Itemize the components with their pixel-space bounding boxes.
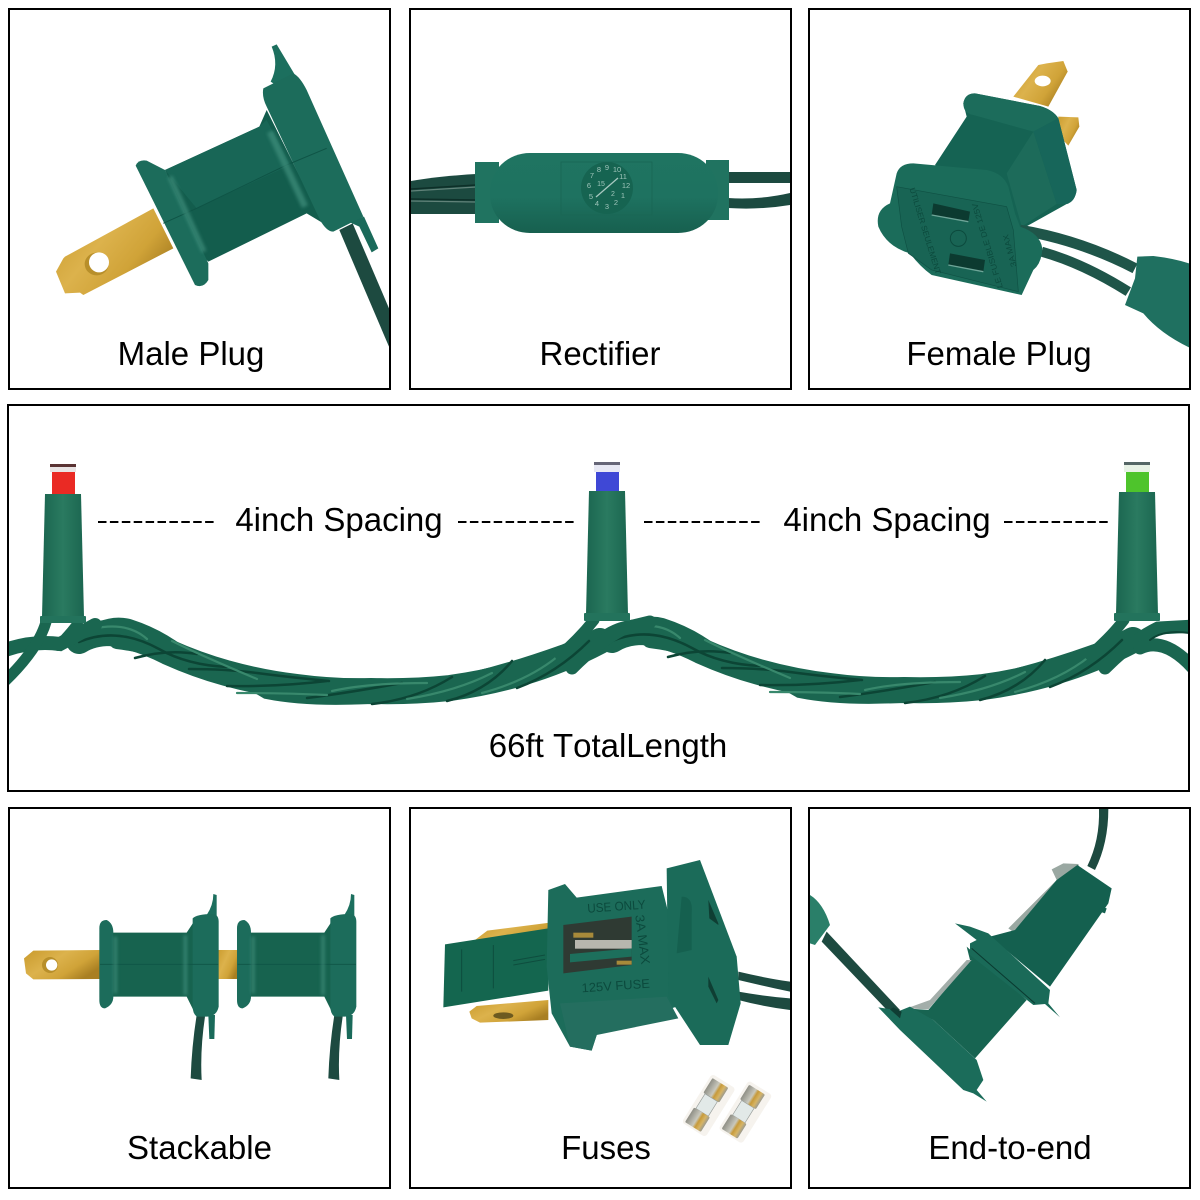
label: spacing left: 4inch Spacing [235,501,443,538]
label: total length: 66ft TotalLength [489,727,727,764]
rectifier photo: 12 [622,181,630,190]
label: rectifier: Rectifier [539,335,661,372]
female plug photo: 3A MAX [1001,233,1019,268]
bulb: green [1114,462,1160,621]
fused plug photo: 3A MAX [632,914,652,966]
panel: end-to-end [809,808,1190,1188]
twisted wire [0,620,1195,704]
panel: light string spacing [0,405,1195,791]
panel frame [410,9,791,389]
label: stackable: Stackable [127,1129,272,1166]
panel: female plug [809,9,1190,389]
label: female plug: Female Plug [906,335,1092,372]
rectifier photo: 11 [619,172,627,181]
rectifier photo: 15 [597,181,605,188]
female plug photo [878,61,1189,347]
rectifier photo: 5 [589,192,593,201]
label: spacing right: 4inch Spacing [783,501,991,538]
rectifier photo [411,153,790,233]
panel frame [8,405,1189,791]
rectifier photo: 4 [595,199,599,208]
fused plug photo: 125V FUSE [581,977,650,995]
fuse 2 [718,1080,772,1144]
rectifier photo: 6 [587,181,591,190]
dashed spacing lines [98,521,1108,523]
connected plugs photo [810,809,1112,1102]
rectifier photo: 10 [613,165,621,174]
panel frame [410,808,791,1188]
rectifier photo: 1 [621,191,625,200]
panel: fuses [410,808,791,1188]
rectifier photo: 2 [611,191,615,198]
fused plug photo: USE ONLY [587,898,646,916]
panel: stackable [9,808,390,1188]
fuse 1 [682,1074,736,1137]
panel frame [809,9,1190,389]
panel frame [9,9,390,389]
panel frame [9,808,390,1188]
rectifier photo: 9 [605,163,609,172]
male plug photo [56,44,389,347]
label: end-to-end: End-to-end [928,1129,1092,1166]
female plug photo: UTILISER SEULEMENT [908,187,943,275]
panel: rectifier [410,9,791,389]
female plug photo: LE FUSIBLE DE 125V [970,201,1005,289]
fused plug photo [443,860,790,1051]
panel frame [809,808,1190,1188]
stackable plugs photo [24,894,356,1080]
label: fuses: Fuses [561,1129,651,1166]
rectifier photo: 3 [605,202,609,211]
rectifier photo: 8 [597,165,601,174]
rectifier photo: 7 [590,171,594,180]
label: male plug: Male Plug [118,335,264,372]
rectifier photo: 2 [614,198,618,207]
bulb: red [40,464,86,623]
panel: male plug [9,9,390,389]
bulb: blue [584,462,630,621]
